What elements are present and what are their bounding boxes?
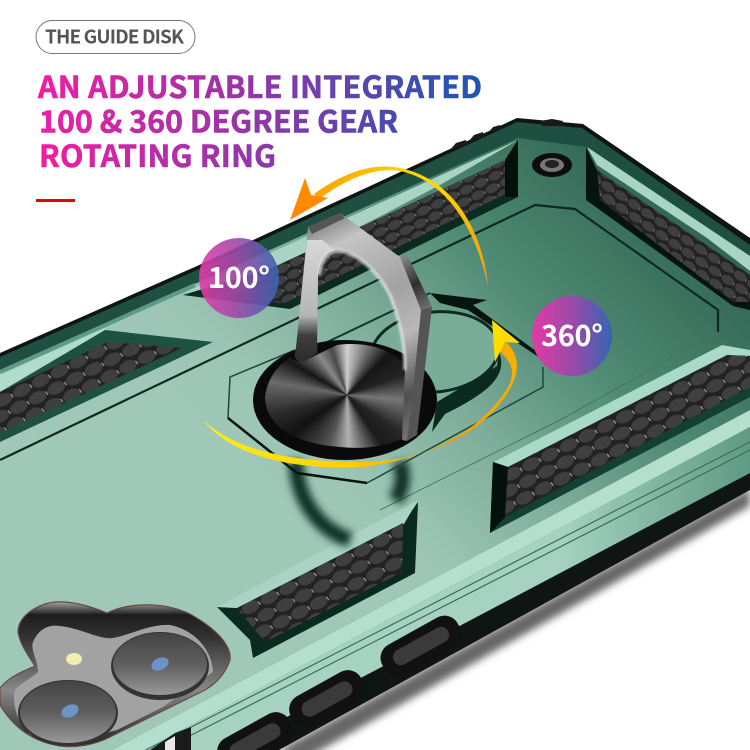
arrow: 100 degree rotation bbox=[290, 167, 488, 287]
button: middle bbox=[284, 665, 370, 733]
arrow: 360 degree rotation bbox=[203, 320, 520, 467]
grip: bottom bbox=[217, 500, 418, 658]
bottom grip texture bbox=[237, 523, 403, 642]
top right grip texture bbox=[597, 170, 750, 302]
red accent line bbox=[36, 199, 75, 202]
arch side chamfer bbox=[400, 254, 432, 311]
top rim highlight bbox=[183, 140, 518, 295]
badge: 100 degrees bbox=[199, 238, 279, 318]
panel lower faint line bbox=[380, 332, 718, 510]
flash bbox=[66, 653, 82, 665]
tag: the guide disk bbox=[36, 20, 195, 54]
disk brushed face bbox=[265, 344, 405, 448]
arc bbox=[203, 342, 517, 467]
arc bbox=[314, 167, 488, 287]
lower right grip black side bbox=[490, 462, 508, 533]
recess wall bbox=[432, 352, 501, 432]
arch face bbox=[295, 213, 421, 441]
shadow left arc bbox=[296, 460, 350, 540]
right rim highlight bbox=[587, 147, 750, 271]
left rim highlight bbox=[0, 328, 108, 392]
lower right grip texture bbox=[505, 355, 750, 517]
button: upper bbox=[375, 610, 467, 682]
tag outline bbox=[36, 20, 195, 54]
side wall groove bbox=[146, 442, 750, 750]
seat lower black edge bbox=[228, 418, 367, 483]
bottom grip highlight bbox=[217, 500, 418, 608]
top right grip well bbox=[586, 147, 750, 310]
side buttons bbox=[150, 610, 467, 750]
side wall highlight band bbox=[112, 410, 750, 750]
lower right grip highlight bbox=[493, 345, 750, 467]
camera module bbox=[0, 602, 230, 747]
corner vents bbox=[150, 727, 191, 750]
top edge buttons bbox=[450, 119, 563, 150]
grip: top right bbox=[586, 147, 750, 310]
arrowhead bbox=[492, 320, 520, 362]
screw head bbox=[540, 158, 564, 172]
title line 3: ROTATING RING bbox=[39, 132, 276, 176]
title line 1: AN ADJUSTABLE INTEGRATED bbox=[37, 63, 482, 107]
top grip texture bbox=[215, 160, 505, 303]
grip: lower right bbox=[490, 345, 750, 533]
left grip well bbox=[0, 330, 213, 442]
lens ring bbox=[18, 680, 118, 746]
ring disk bbox=[253, 340, 437, 460]
case drop shadow bbox=[279, 488, 750, 750]
lens glint bbox=[59, 702, 81, 720]
lower right grip well bbox=[490, 345, 750, 533]
tag label: THE GUIDE DISK bbox=[45, 22, 185, 50]
left grip texture bbox=[0, 342, 182, 433]
main lens bbox=[111, 632, 209, 700]
title line 2: 100 & 360 DEGREE GEAR bbox=[39, 98, 398, 142]
badge: 360 degrees bbox=[532, 296, 612, 376]
rear screw bbox=[532, 153, 572, 177]
second lens bbox=[18, 680, 118, 746]
rotating recess bbox=[367, 306, 503, 398]
screw collar bbox=[532, 153, 572, 177]
ring arch bbox=[295, 213, 432, 441]
top grip well bbox=[183, 140, 518, 309]
panel outline bbox=[0, 205, 718, 460]
badge circle bbox=[199, 238, 279, 318]
top grip black corner bbox=[505, 140, 518, 197]
button: lower cap bbox=[227, 720, 283, 750]
badge circle bbox=[532, 296, 612, 376]
rim inner strip bbox=[0, 285, 195, 372]
octagonal ring seat bbox=[228, 293, 543, 483]
lens glass bbox=[113, 633, 207, 695]
seat outline bbox=[228, 350, 543, 483]
camera rim bbox=[0, 602, 230, 747]
badge label: 100° bbox=[208, 255, 270, 297]
lens ring bbox=[111, 632, 209, 700]
button: middle cap bbox=[299, 678, 355, 720]
side wall bbox=[144, 427, 750, 750]
seat top dark line bbox=[300, 293, 430, 355]
lens glint bbox=[149, 655, 171, 673]
bottom grip well bbox=[217, 502, 418, 658]
button: upper cap bbox=[390, 624, 452, 668]
title bbox=[37, 63, 482, 176]
arch left post bbox=[295, 240, 335, 363]
grip: top bbox=[183, 140, 518, 309]
button: lower bbox=[212, 707, 298, 750]
camera plate bbox=[14, 625, 213, 745]
badge label: 360° bbox=[541, 313, 603, 355]
ring shadow bbox=[296, 460, 402, 540]
arch shoulder top bbox=[308, 213, 345, 234]
screw socket bbox=[545, 160, 559, 168]
arch inner glow bbox=[319, 251, 405, 370]
arrowhead bbox=[290, 178, 328, 220]
shadow right arc bbox=[395, 462, 402, 500]
lens glass bbox=[20, 681, 116, 743]
disk base bbox=[253, 340, 437, 460]
arch right post outer bbox=[407, 307, 432, 441]
seat black notch bbox=[430, 293, 540, 358]
vent stripe bbox=[165, 736, 175, 750]
grip: left bbox=[0, 330, 213, 442]
